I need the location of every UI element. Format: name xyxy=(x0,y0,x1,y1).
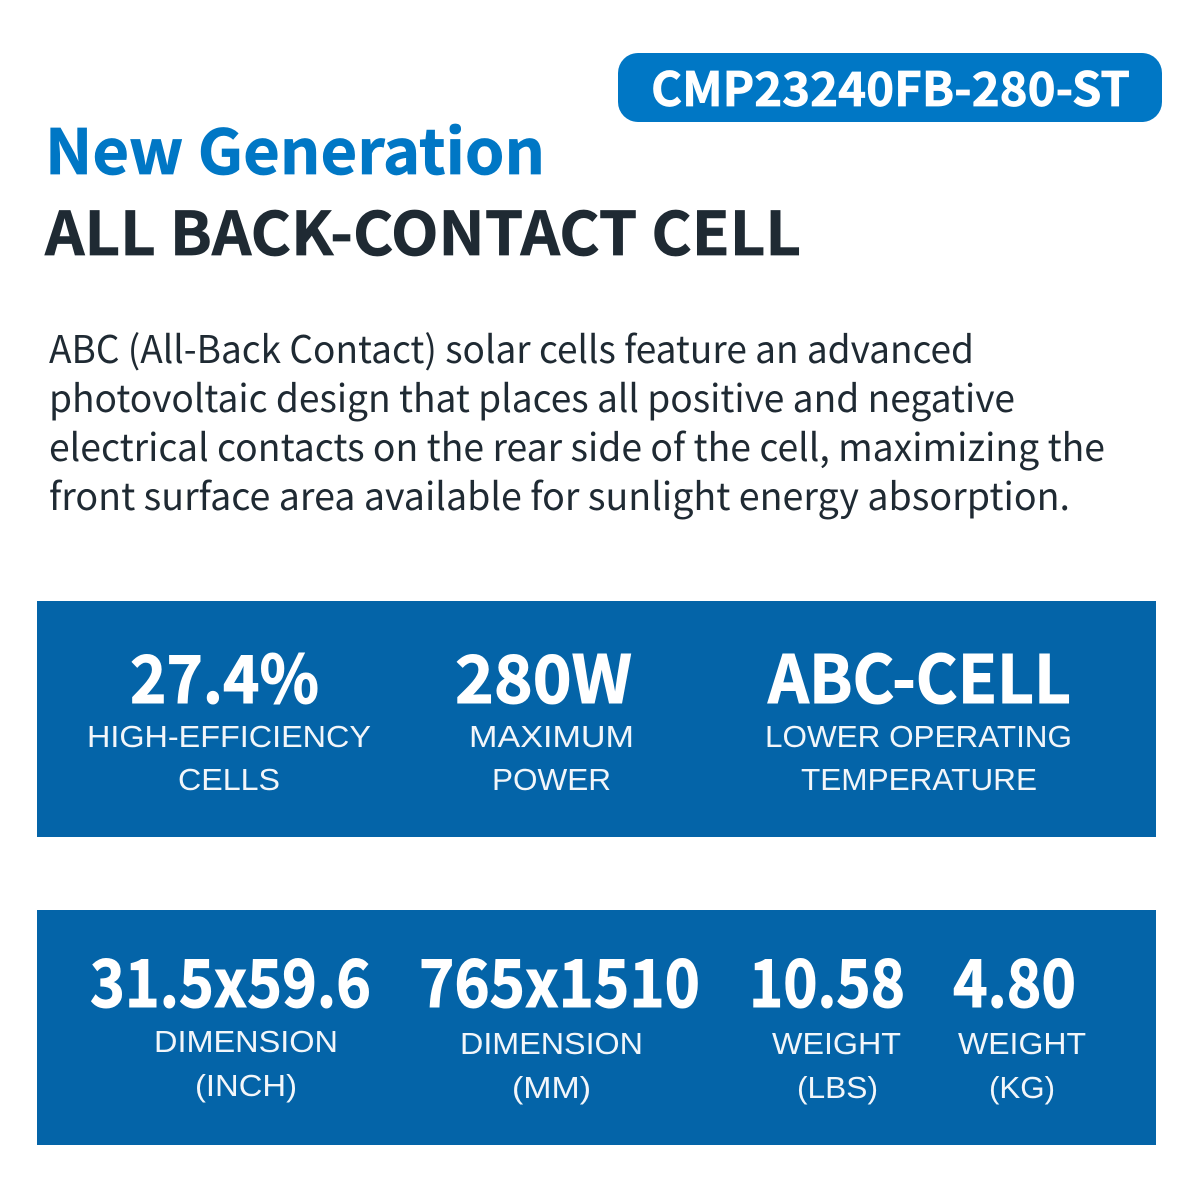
spec: dimension in inches: (INCH) xyxy=(195,1068,297,1103)
stat: abc-cell xyxy=(765,627,1072,797)
panel: key features xyxy=(37,601,1156,837)
description paragraph: front surface area available for sunlight energy absorption. xyxy=(49,466,1070,521)
stat: abc-cell: LOWER OPERATING xyxy=(765,719,1072,754)
description paragraph xyxy=(49,319,1105,521)
stat: abc-cell: TEMPERATURE xyxy=(801,762,1037,797)
stat: efficiency: CELLS xyxy=(178,762,280,797)
spec: dimension in millimetres: (MM) xyxy=(512,1070,591,1105)
stat: efficiency: 27.4% xyxy=(130,627,319,723)
stat: maximum power: MAXIMUM xyxy=(469,719,634,754)
panel: specifications xyxy=(37,910,1156,1145)
description paragraph: photovoltaic design that places all positive and negative xyxy=(49,368,1015,423)
spec: dimension in inches xyxy=(90,931,371,1103)
spec: weight in kilograms: WEIGHT xyxy=(958,1026,1086,1061)
model number badge: CMP23240FB-280-ST xyxy=(651,51,1130,120)
description paragraph: electrical contacts on the rear side of the cell, maximizing the xyxy=(49,417,1105,472)
spec: weight in pounds: 10.58 xyxy=(749,931,905,1027)
spec: weight in kilograms xyxy=(953,931,1086,1105)
heading: all back-contact cell: ALL BACK-CONTACT CELL xyxy=(44,186,801,273)
spec: dimension in inches: DIMENSION xyxy=(154,1024,338,1059)
stat: efficiency xyxy=(87,627,371,797)
spec: weight in kilograms: 4.80 xyxy=(953,931,1076,1027)
heading: new generation: New Generation xyxy=(45,102,545,192)
spec: dimension in millimetres: 765x1510 xyxy=(419,931,700,1027)
spec: weight in pounds: (LBS) xyxy=(797,1070,878,1105)
spec: weight in pounds xyxy=(749,931,905,1105)
spec: dimension in millimetres xyxy=(419,931,700,1105)
spec: weight in pounds: WEIGHT xyxy=(772,1026,901,1061)
stat: maximum power xyxy=(455,627,634,797)
stat: abc-cell: ABC-CELL xyxy=(767,627,1071,723)
stat: maximum power: 280W xyxy=(455,627,632,723)
stat: efficiency: HIGH-EFFICIENCY xyxy=(87,719,371,754)
spec: weight in kilograms: (KG) xyxy=(989,1070,1055,1105)
description paragraph: ABC (All-Back Contact) solar cells feature an advanced xyxy=(49,319,974,374)
spec: dimension in inches: 31.5x59.6 xyxy=(90,931,371,1027)
spec: dimension in millimetres: DIMENSION xyxy=(460,1026,643,1061)
stat: maximum power: POWER xyxy=(492,762,611,797)
